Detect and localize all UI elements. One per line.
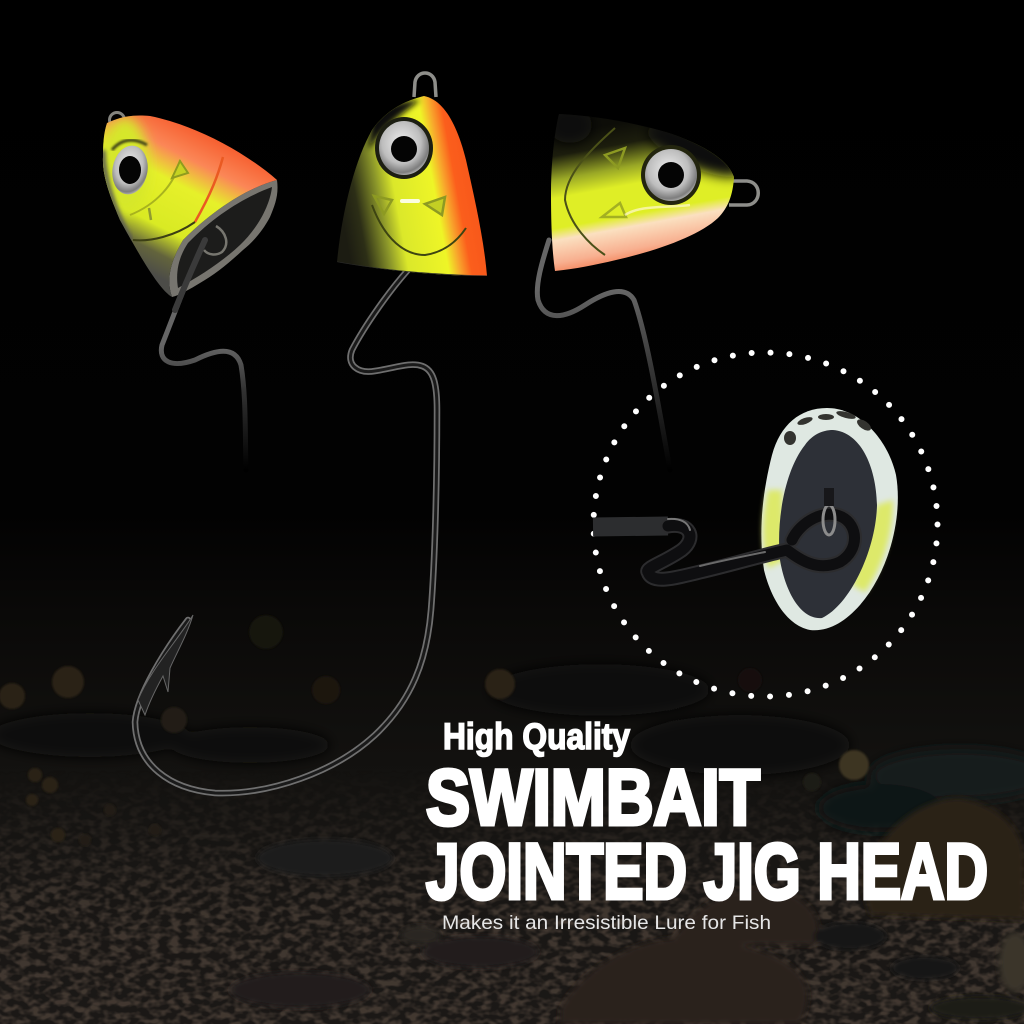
background: dark pebble beach bbox=[0, 590, 1024, 1024]
cavity interior: head 1 bbox=[177, 187, 272, 288]
eye: head 1 bbox=[109, 143, 151, 197]
egg rim bbox=[761, 408, 898, 630]
wire stub bbox=[593, 526, 668, 527]
head body: head 3 bbox=[551, 114, 734, 271]
kicker: High Quality: High Quality bbox=[443, 716, 630, 757]
rim and cavity: head 1 bbox=[169, 180, 278, 297]
subtitle: Makes it an Irresistible Lure for Fish bbox=[442, 912, 771, 934]
line eye: head 3 bbox=[729, 181, 758, 205]
heading line 1: SWIMBAIT bbox=[426, 752, 760, 842]
hook shank: head 1 bbox=[161, 262, 246, 470]
jig head 2 with full hook bbox=[135, 73, 495, 793]
attachment ring bbox=[823, 505, 835, 535]
hook point with barb bbox=[138, 615, 193, 715]
hook neck: head 1 bbox=[175, 240, 205, 310]
jig head 1: tilted, orange top with open rim bbox=[102, 111, 278, 454]
head body: head 2 bbox=[337, 96, 487, 276]
yellow paint band bbox=[763, 490, 893, 592]
jig head 3: horizontal, black top bbox=[537, 105, 758, 470]
line eye: head 2 bbox=[414, 73, 436, 97]
eye: head 3 bbox=[641, 145, 701, 205]
text block: product title bbox=[426, 716, 988, 934]
painted speckle along top bbox=[784, 410, 873, 445]
long hook shaft and bend bbox=[135, 270, 437, 793]
ring post bbox=[824, 488, 834, 506]
dark inner cavity bbox=[779, 430, 877, 618]
eye: head 2 bbox=[375, 117, 433, 179]
bent wire bbox=[648, 514, 854, 579]
attachment ring: head 1 bbox=[204, 226, 226, 254]
detail callout: dotted circle bbox=[594, 352, 938, 696]
head body: head 1 bbox=[102, 116, 277, 297]
detail: rear view of head with jointed wire bbox=[593, 408, 898, 630]
hook shank: head 3 bbox=[537, 240, 670, 470]
line eye: head 1 bbox=[110, 112, 124, 128]
